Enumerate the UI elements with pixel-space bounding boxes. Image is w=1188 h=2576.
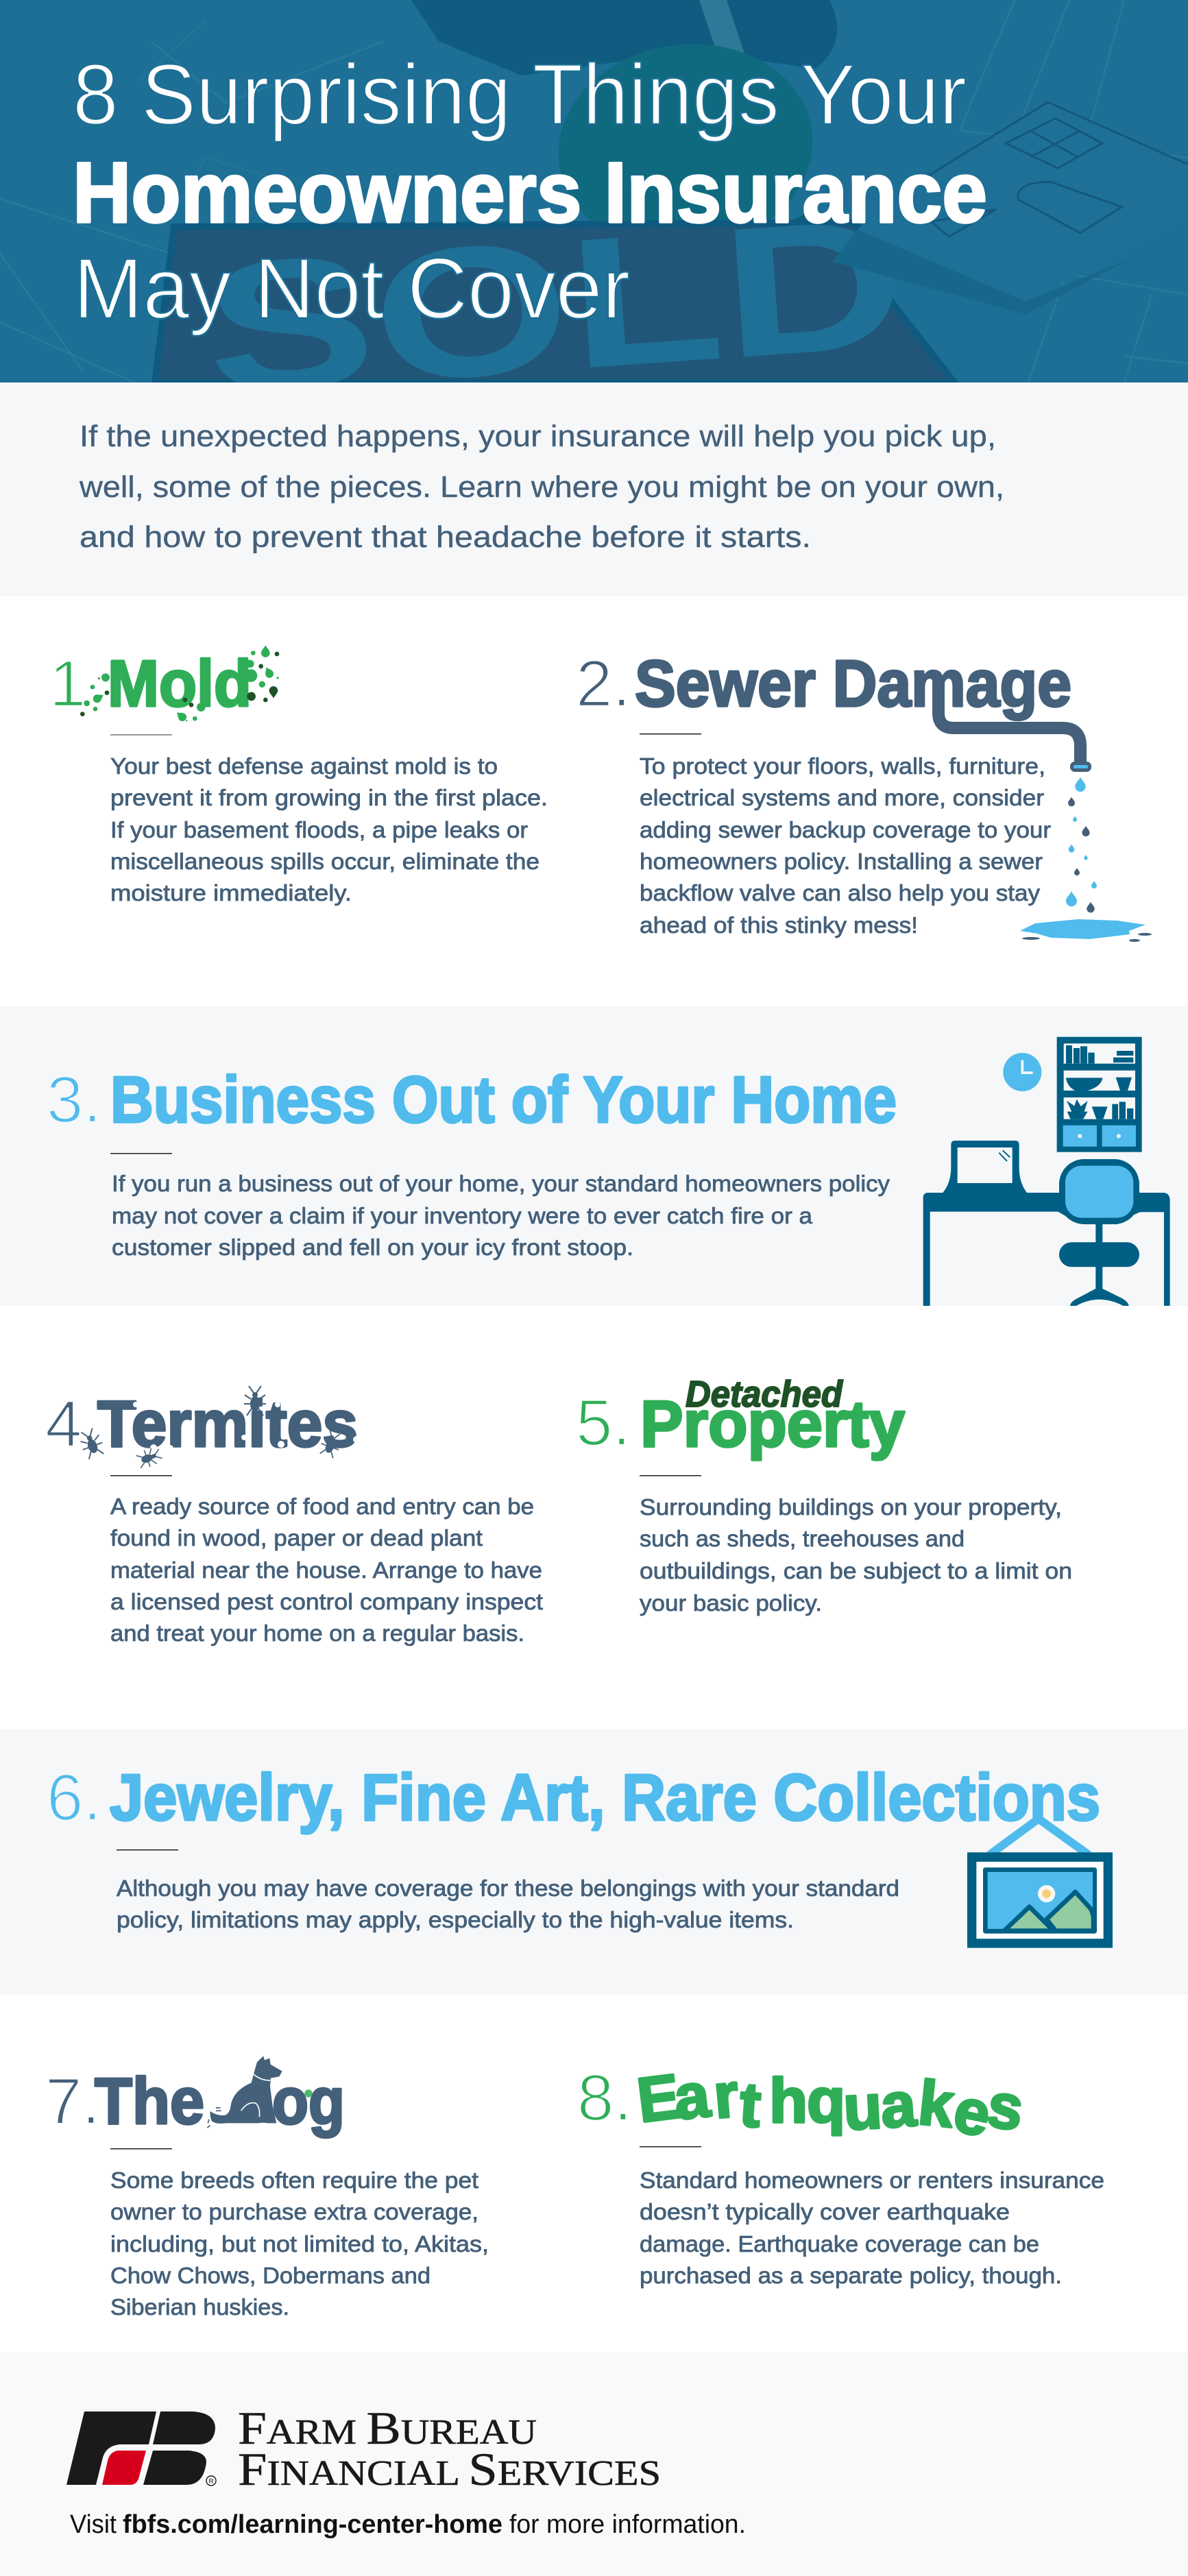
body text	[112, 1171, 890, 1260]
logo: wordmark: FARM BUREAU	[238, 2402, 537, 2454]
panel: footer	[0, 2353, 1188, 2576]
body text: If you run a business out of your home, your standard homeowners policy	[112, 1171, 890, 1196]
body text: damage. Earthquake coverage can be	[640, 2231, 1039, 2257]
heading: 1. Mold: Mold	[108, 647, 252, 720]
bookcase	[1057, 1037, 1142, 1152]
body text: moisture immediately.	[110, 880, 352, 906]
photo: SOLD sign: SOLD	[199, 179, 911, 434]
body text: material near the house. Arrange to have	[110, 1557, 542, 1583]
heading: 5. Detached Property: Property	[640, 1387, 905, 1461]
body text: such as sheds, treehouses and	[640, 1526, 965, 1551]
heading: 7. The Dog	[45, 2065, 345, 2138]
heading: 6. Jewelry, Fine Art, Rare Collections: Jewelry, Fine Art, Rare Collections	[110, 1761, 1100, 1834]
body text: miscellaneous spills occur, eliminate the	[110, 849, 540, 874]
icon: mold spores	[80, 645, 279, 723]
panel: intro	[0, 382, 1188, 596]
body text: owner to purchase extra coverage,	[110, 2199, 478, 2224]
heading: 6. Jewelry, Fine Art, Rare Collections: 6.	[47, 1761, 101, 1834]
panel: 4 termites	[0, 1306, 1188, 1729]
heading: 7. The Dog: 7.	[45, 2065, 100, 2138]
title: Homeowners Insurance	[73, 145, 987, 241]
body text: may not cover a claim if your inventory were to ever catch fire or a	[112, 1203, 813, 1228]
body text: your basic policy.	[640, 1590, 822, 1616]
heading: 4. Termites: 4	[45, 1387, 82, 1461]
body text	[640, 2167, 1104, 2288]
body text: outbuildings, can be subject to a limit on	[640, 1558, 1072, 1583]
panel: 3 business out of your home	[0, 1006, 1188, 1308]
title: 8 Surprising Things Your	[73, 47, 967, 143]
body text: To protect your floors, walls, furniture,	[640, 753, 1045, 779]
body text: Standard homeowners or renters insurance	[640, 2167, 1104, 2193]
panel: header photo banner	[0, 0, 1188, 434]
icon: termites	[77, 1386, 343, 1470]
heading: 2. Sewer Damage: 2.	[576, 647, 631, 720]
body text: If your basement floods, a pipe leaks or	[110, 817, 528, 842]
call to action: fbfs.com/learning-center-home	[123, 2510, 502, 2539]
icon: sitting dog	[207, 2056, 313, 2128]
call to action: for more information.	[509, 2510, 746, 2539]
photo: blueprint lines	[0, 0, 1188, 384]
panel: 5 detached property	[576, 1374, 1072, 1616]
intro text: If the unexpected happens, your insurance will help you pick up,	[80, 420, 996, 453]
body text	[110, 753, 548, 906]
body text	[640, 753, 1051, 938]
body text: Your best defense against mold is to	[110, 753, 498, 779]
heading: 3. Business Out of Your Home: Business Out of Your Home	[110, 1063, 897, 1137]
logo: Farm Bureau mark	[66, 2411, 216, 2486]
heading: 8. Earthquakes: 8.	[577, 2061, 632, 2135]
heading: 5. Detached Property	[576, 1374, 905, 1461]
body text: prevent it from growing in the first place.	[110, 785, 548, 810]
body text: a licensed pest control company inspect	[110, 1589, 543, 1614]
body text: ahead of this stinky mess!	[640, 912, 918, 938]
body text	[110, 1494, 543, 1646]
photo: model house	[832, 102, 1188, 314]
title	[73, 47, 987, 337]
heading: 1. Mold	[49, 647, 252, 720]
body text: Chow Chows, Dobermans and	[110, 2263, 431, 2288]
heading: 5. Detached Property: Detached	[686, 1374, 843, 1415]
photo: key ring and dark backdrop	[411, 0, 837, 267]
body text: and treat your home on a regular basis.	[110, 1620, 524, 1646]
title: May Not Cover	[73, 241, 630, 337]
icon: home office	[923, 1037, 1170, 1308]
body text: backflow valve can also help you stay	[640, 880, 1041, 906]
panel: 1 mold	[49, 645, 548, 906]
heading: 5. Detached Property: 5.	[576, 1386, 631, 1459]
body text	[117, 1875, 899, 1932]
clock	[1003, 1053, 1041, 1091]
body text	[640, 1494, 1072, 1616]
intro text: and how to prevent that headache before it starts.	[80, 520, 811, 554]
body text: policy, limitations may apply, especially to the high-value items.	[117, 1907, 794, 1932]
body text: purchased as a separate policy, though.	[640, 2263, 1062, 2288]
icon: leaking pipe	[938, 675, 1152, 942]
heading: 1. Mold: 1	[49, 647, 86, 720]
heading: 8. Earthquakes: Earthquakes	[633, 2060, 1028, 2150]
body text: found in wood, paper or dead plant	[110, 1525, 483, 1551]
body text: Some breeds often require the pet	[110, 2167, 478, 2193]
logo: Farm Bureau mark: R	[208, 2478, 214, 2486]
body text: homeowners policy. Installing a sewer	[640, 849, 1043, 874]
heading: 7. The Dog: og	[272, 2065, 345, 2138]
photo: SOLD sign	[155, 179, 954, 434]
body text: customer slipped and fell on your icy front stoop.	[112, 1235, 633, 1260]
panel: 7 the dog	[45, 2056, 489, 2320]
body text: electrical systems and more, consider	[640, 785, 1044, 810]
body text: including, but not limited to, Akitas,	[110, 2231, 489, 2257]
body text: Siberian huskies.	[110, 2294, 289, 2320]
call to action: Visit	[70, 2510, 117, 2539]
chair	[1059, 1159, 1139, 1306]
body text: A ready source of food and entry can be	[110, 1494, 534, 1519]
heading: 2. Sewer Damage: Sewer Damage	[635, 647, 1071, 720]
body text: doesn’t typically cover earthquake	[640, 2199, 1010, 2224]
panel: 6 jewelry fine art rare collections	[0, 1729, 1188, 1994]
logo: wordmark	[238, 2402, 661, 2495]
intro text	[79, 420, 1004, 554]
heading: 4. Termites: Termites	[97, 1387, 358, 1461]
heading: 7. The Dog: The	[95, 2065, 204, 2138]
logo: wordmark: FINANCIAL SERVICES	[238, 2443, 661, 2495]
heading: 3. Business Out of Your Home: 3.	[47, 1063, 101, 1137]
body text: Surrounding buildings on your property,	[640, 1494, 1062, 1520]
panel: 2 sewer damage	[576, 647, 1152, 942]
laptop	[942, 1141, 1028, 1194]
intro text: well, some of the pieces. Learn where you might be on your own,	[79, 470, 1004, 504]
desk	[923, 1193, 1170, 1308]
panel: 8 earthquakes	[577, 2060, 1104, 2288]
body text: Although you may have coverage for these belongings with your standard	[117, 1875, 899, 1901]
icon: framed picture	[967, 1819, 1113, 1948]
call to action	[70, 2510, 746, 2539]
chewed edges on letters	[133, 1402, 365, 1452]
body text: adding sewer backup coverage to your	[640, 817, 1051, 842]
body text	[110, 2167, 489, 2320]
